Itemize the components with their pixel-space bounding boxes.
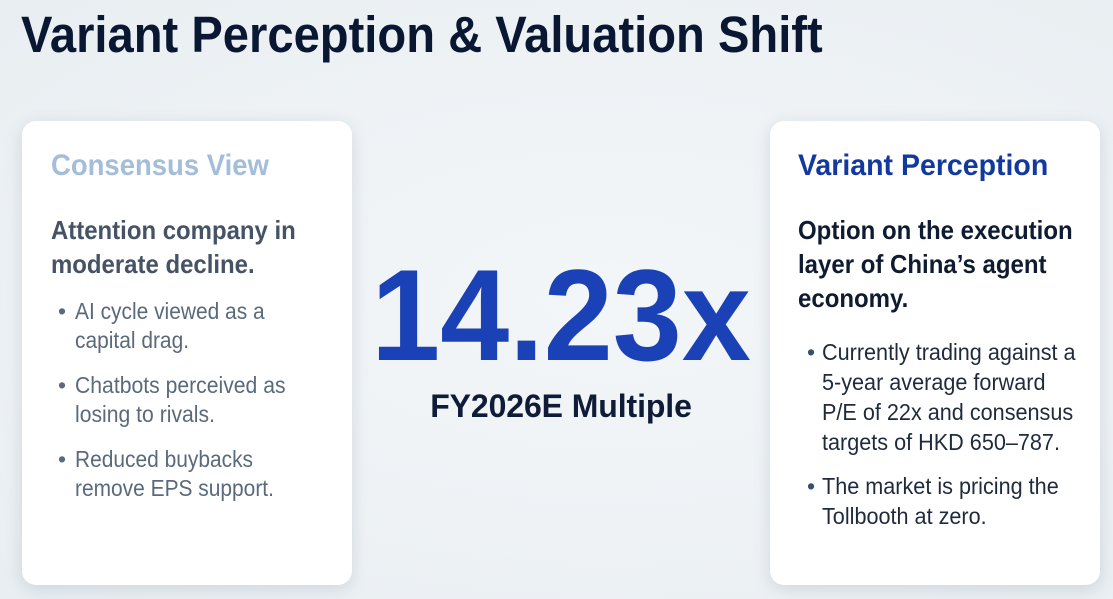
central multiple (371, 242, 751, 424)
bullet list: variant points (807, 339, 1076, 529)
bullet list: consensus points: • (58, 298, 66, 324)
heading: consensus view: Consensus View (51, 149, 269, 182)
text: consensus summary: moderate decline. (51, 249, 255, 279)
heading: variant perception: Variant Perception (798, 149, 1048, 182)
panel: variant perception (770, 121, 1100, 585)
bullet list: variant points: • (807, 473, 815, 499)
text: variant summary (798, 215, 1073, 313)
title: Variant Perception & Valuation Shift (21, 6, 823, 63)
bullet list: variant points: targets of HKD 650–787. (822, 429, 1060, 455)
bullet list: consensus points: capital drag. (75, 327, 189, 353)
bullet list: variant points: The market is pricing the (822, 473, 1059, 499)
panel: consensus view (22, 121, 352, 585)
bullet list: variant points: P/E of 22x and consensus (822, 399, 1073, 425)
bullet list: consensus points: • (58, 372, 66, 398)
text: variant summary: layer of China’s agent (798, 249, 1046, 279)
number: 14.23x: 14.23x (371, 242, 751, 388)
bullet list: variant points: • (807, 339, 815, 365)
text: consensus summary (51, 215, 296, 279)
text: variant summary: economy. (798, 283, 908, 313)
label: FY2026E multiple: FY2026E Multiple (430, 388, 692, 424)
bullet list: variant points: Currently trading against a (822, 339, 1076, 365)
bullet list: consensus points: losing to rivals. (75, 401, 215, 427)
bullet list: consensus points: Chatbots perceived as (75, 372, 286, 398)
bullet list: consensus points: AI cycle viewed as a (75, 298, 265, 324)
text: consensus summary: Attention company in (51, 215, 296, 245)
bullet list: consensus points: • (58, 446, 66, 472)
bullet list: consensus points (58, 298, 286, 501)
text: variant summary: Option on the execution (798, 215, 1073, 245)
bullet list: variant points: 5-year average forward (822, 369, 1046, 395)
bullet list: consensus points: Reduced buybacks (75, 446, 253, 472)
bullet list: variant points: Tollbooth at zero. (822, 503, 987, 529)
bullet list: consensus points: remove EPS support. (75, 475, 274, 501)
